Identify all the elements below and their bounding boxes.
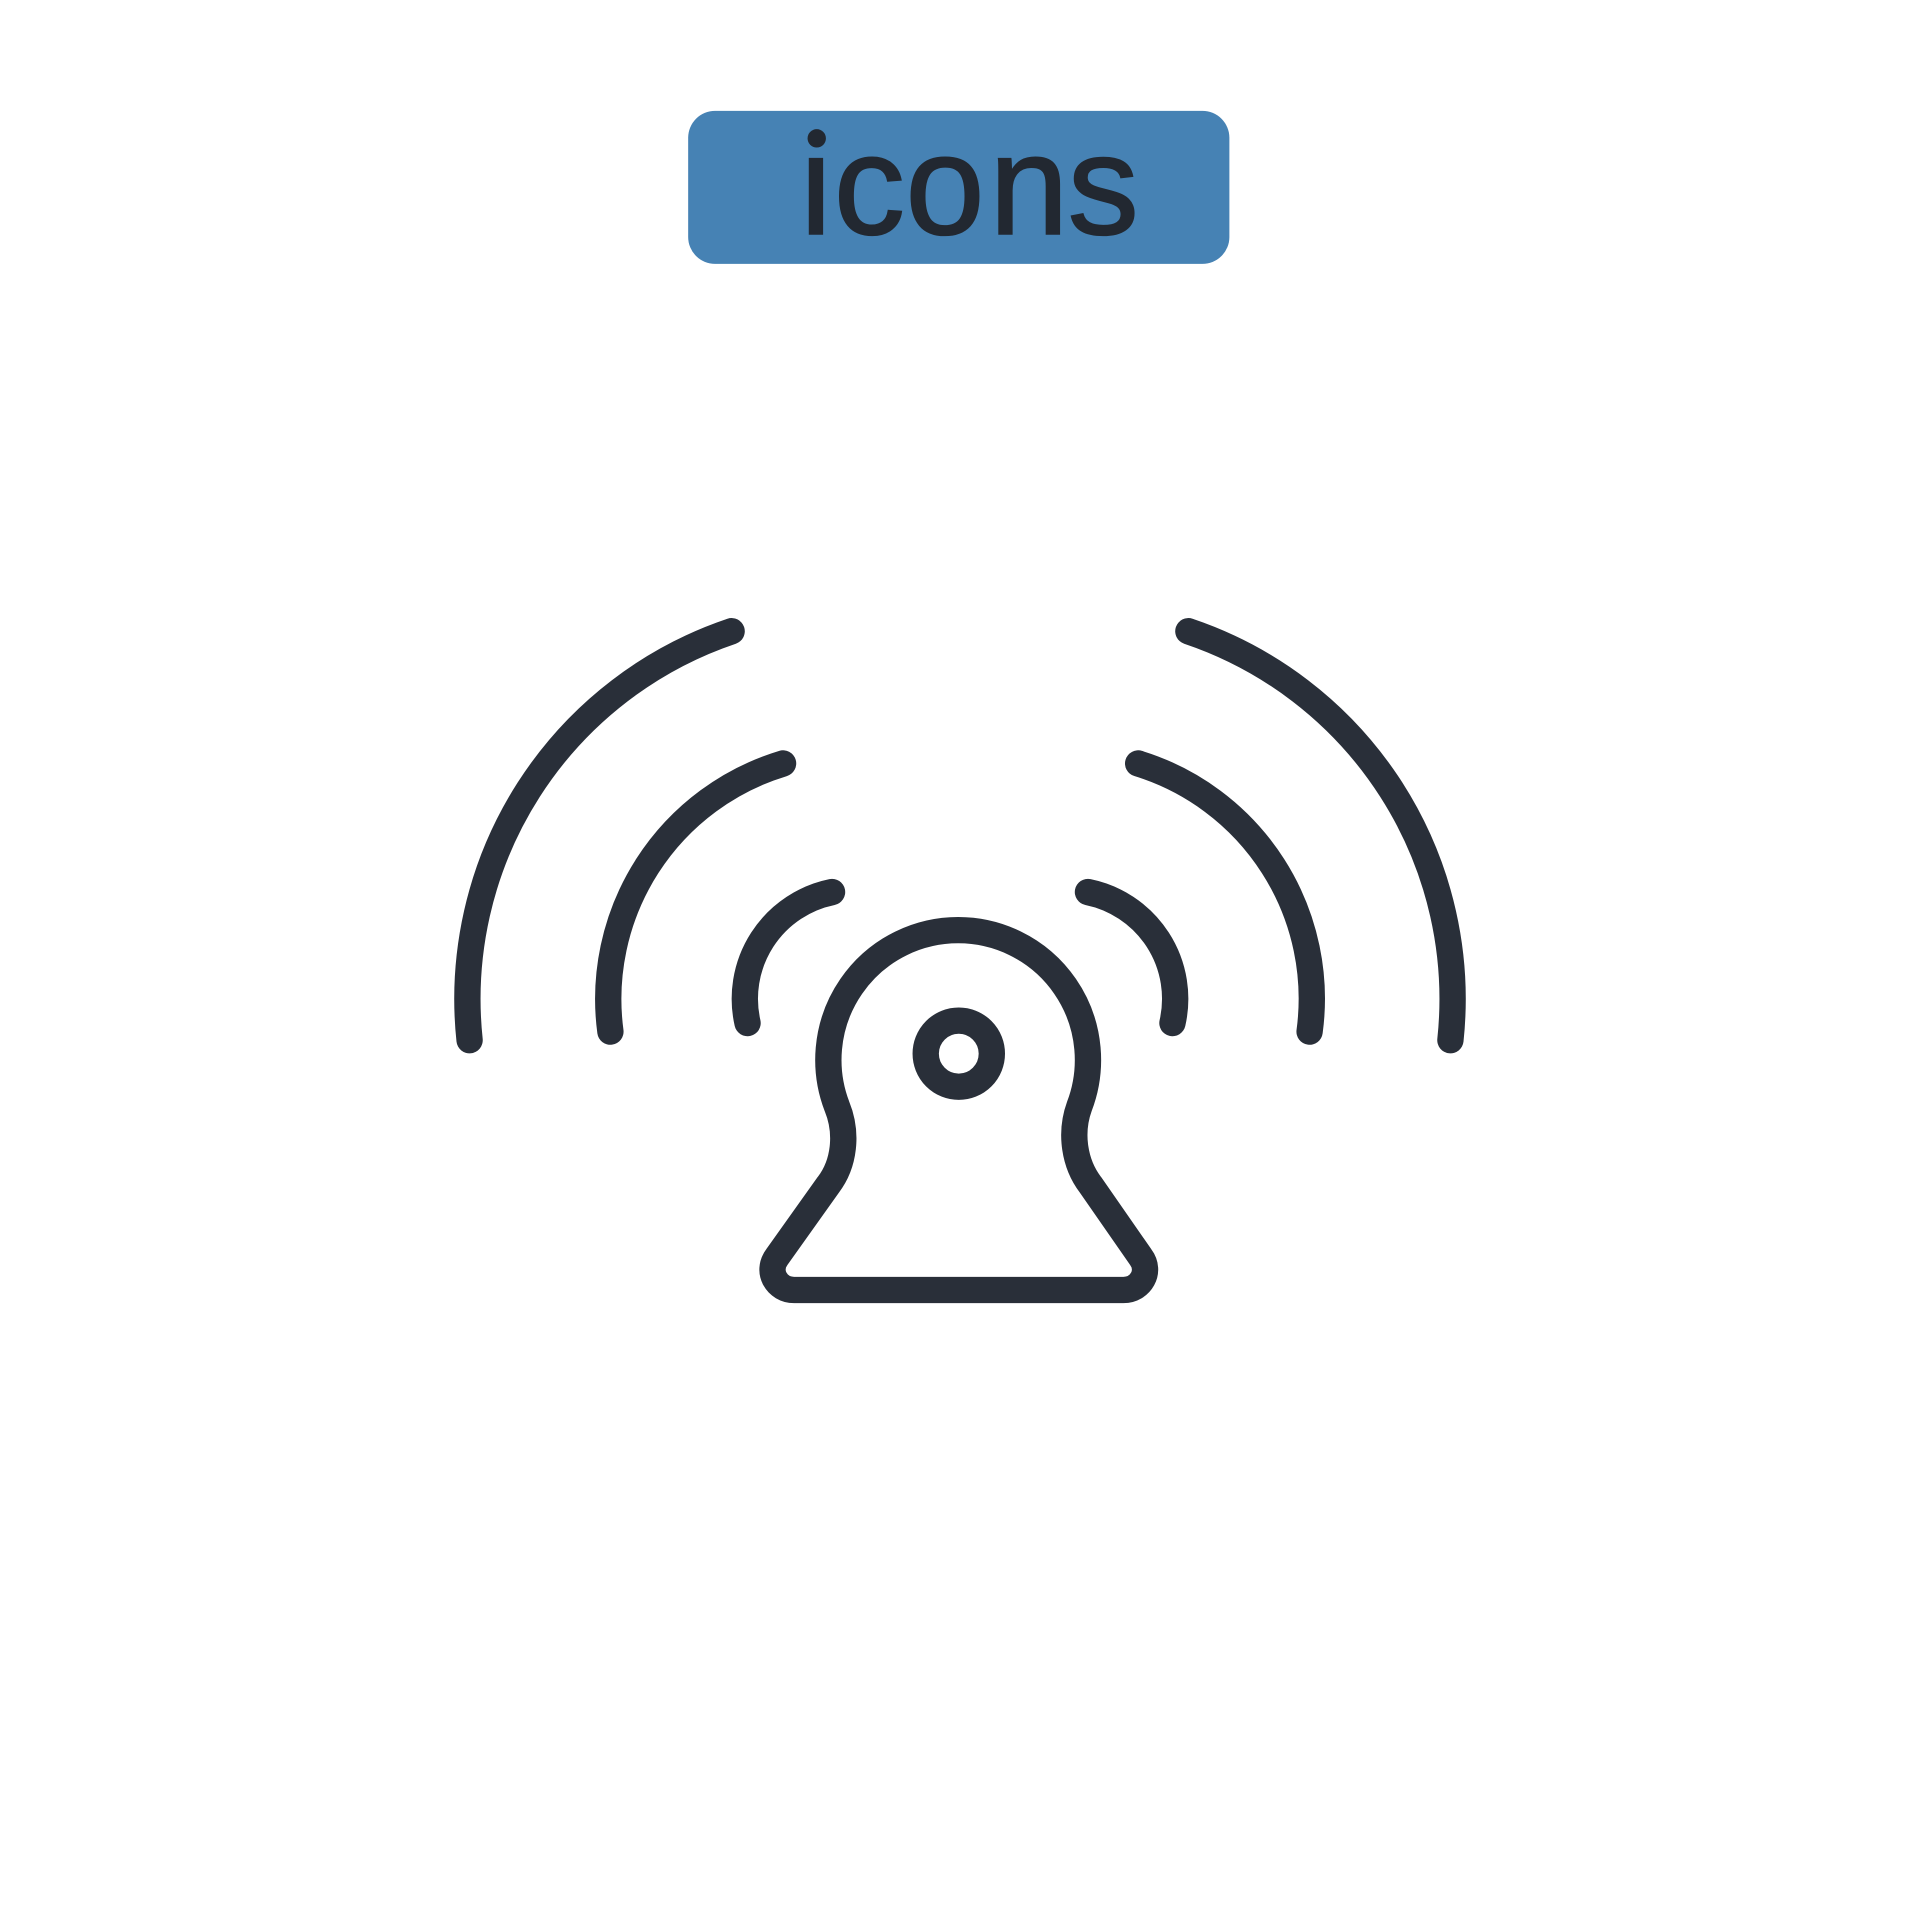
badge: icons label	[688, 106, 1229, 265]
badge: icons label: icons	[800, 106, 1139, 265]
siren body	[773, 930, 1145, 1290]
siren lens	[926, 1021, 992, 1087]
icon: alarm siren with signal waves	[467, 631, 1453, 1290]
right signal waves	[1088, 631, 1453, 1040]
left signal waves	[467, 631, 832, 1040]
